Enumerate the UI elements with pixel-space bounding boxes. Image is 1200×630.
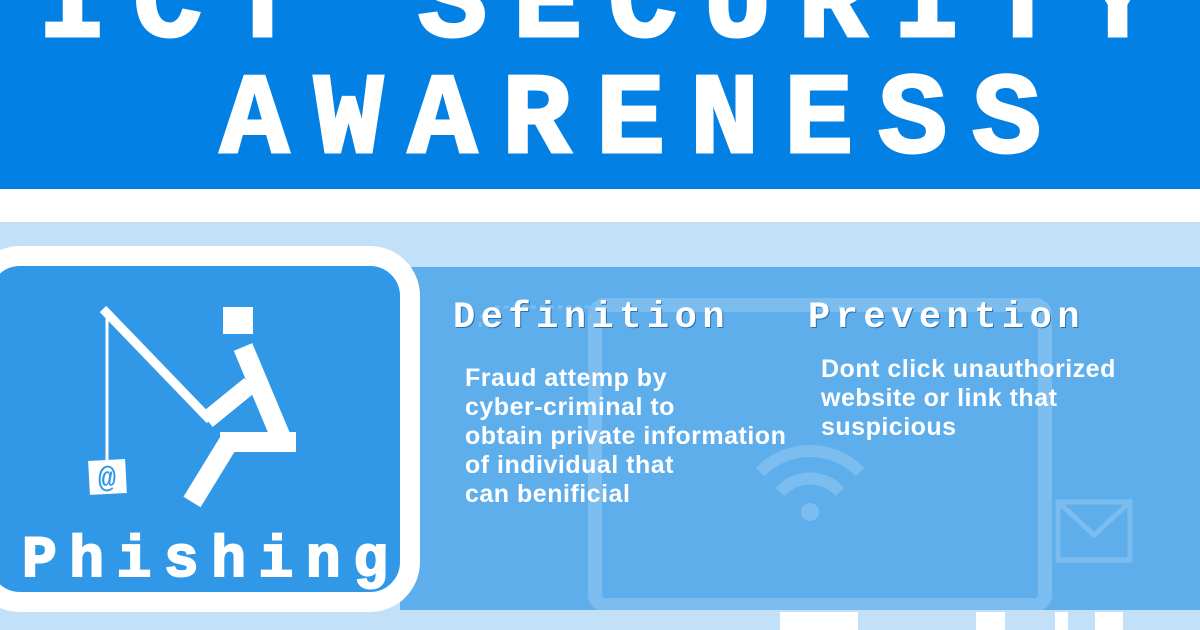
text block: definition: obtain private information [465, 422, 786, 450]
text block: definition: cyber-criminal to [465, 393, 675, 421]
heading: Definition: Definition [453, 297, 730, 339]
header banner [0, 0, 1200, 189]
icon: fisherman [88, 306, 296, 508]
panel: phishing card [0, 246, 420, 612]
text block: prevention: website or link that [821, 384, 1057, 412]
text block: definition: Fraud attemp by [465, 364, 667, 392]
heading: Phishing: Phishing [22, 529, 400, 594]
text block: prevention [821, 355, 1116, 441]
text block: definition [465, 364, 786, 508]
text block: prevention: Dont click unauthorized [821, 355, 1116, 383]
text block: definition: can benificial [465, 480, 630, 508]
heading: Prevention: Prevention [808, 297, 1085, 339]
title line 2: AWARENESS [220, 56, 1066, 187]
text block: definition: of individual that [465, 451, 674, 479]
white gap [0, 189, 1200, 222]
content panel background [400, 267, 1200, 610]
bottom strip decorative blocks [780, 612, 858, 630]
icon: fisherman: @ [98, 463, 116, 497]
text block: prevention: suspicious [821, 413, 957, 441]
